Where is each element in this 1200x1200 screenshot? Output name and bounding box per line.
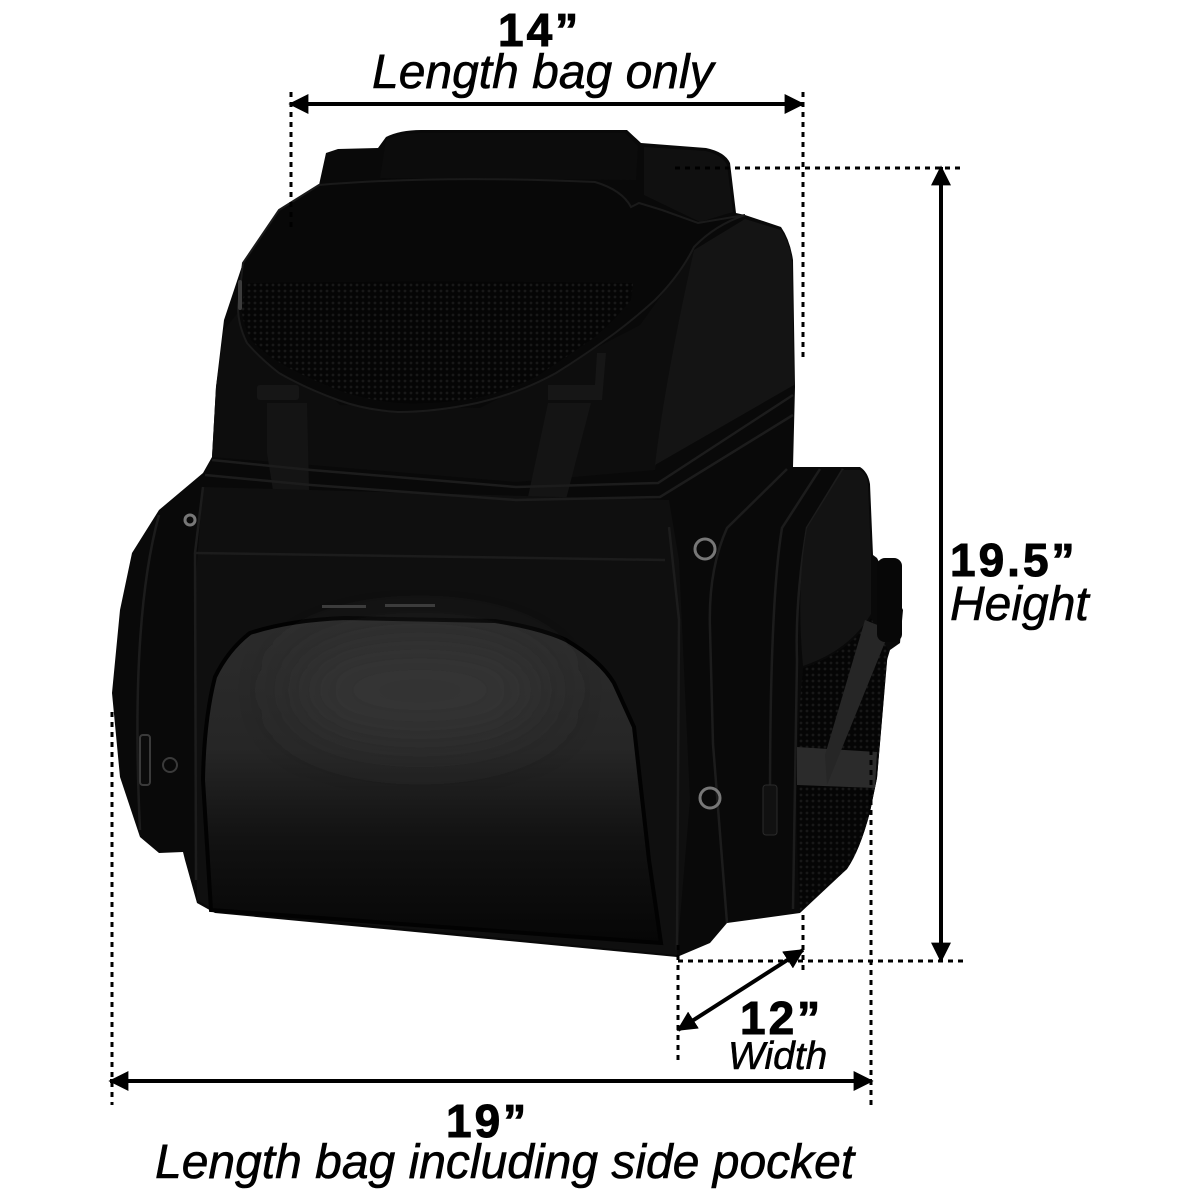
dimension: 19 inch length including side pocket: 19”	[446, 1095, 529, 1147]
dimension: 19.5 inch height: 19.5”	[950, 534, 1078, 586]
dimension: 14 inch length bag only	[290, 4, 803, 357]
mesh pocket	[241, 282, 633, 403]
D rings	[185, 515, 720, 808]
dimension: 12 inch width: Width	[728, 1035, 827, 1078]
dimension: 14 inch length bag only: 14”	[498, 4, 581, 56]
side mesh pocket	[797, 618, 888, 911]
dimension: 19 inch length including side pocket: Length bag including side pocket	[155, 1136, 856, 1189]
lid side panel	[655, 219, 794, 465]
left zipper pull and ring	[140, 735, 177, 785]
dimension: 14 inch length bag only: Length bag only	[372, 46, 717, 99]
back roll	[644, 147, 733, 222]
dimension: 12 inch width: 12”	[740, 992, 823, 1044]
main zipper band	[137, 395, 843, 950]
straps and buckles	[257, 353, 606, 507]
top roll	[380, 133, 638, 180]
front leather pocket	[203, 618, 661, 943]
right side pocket upper panel	[800, 470, 871, 666]
side strap and buckle	[797, 558, 902, 788]
dimension: 19.5 inch height	[675, 167, 1090, 961]
dimension: 19.5 inch height: Height	[950, 578, 1090, 631]
leather highlight	[290, 640, 550, 740]
bag silhouette	[112, 130, 903, 957]
upper compartment fabric	[212, 250, 694, 482]
right zipper pull	[763, 785, 777, 835]
dimension: 12 inch width	[678, 915, 827, 1078]
front body fabric	[194, 487, 690, 955]
flap pocket	[238, 179, 745, 412]
illustration: black motorcycle travel bag	[112, 130, 903, 957]
pocket zipper pulls	[238, 280, 435, 608]
dimension: 19 inch length including side pocket	[110, 712, 872, 1189]
